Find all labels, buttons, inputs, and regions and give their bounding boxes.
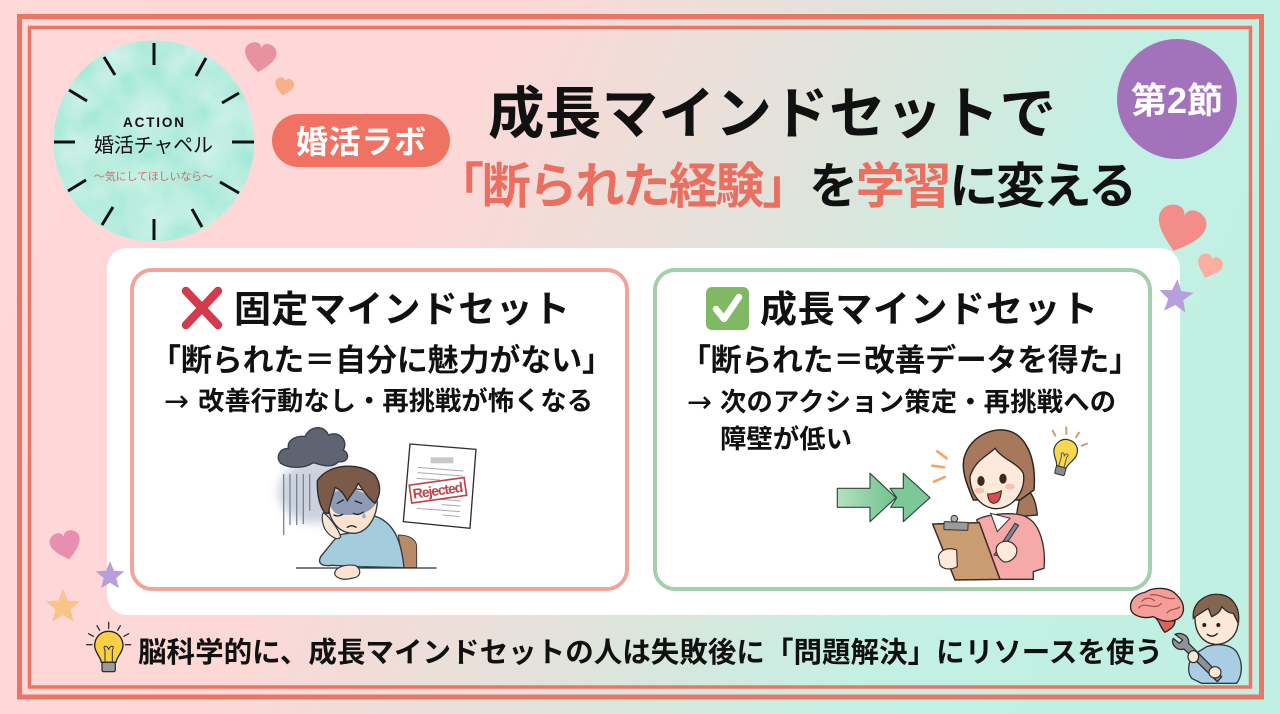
panel: fixed mindset xyxy=(132,270,627,589)
title xyxy=(435,82,1137,214)
decoration: orange heart top xyxy=(273,76,295,97)
fixed mindset arrow: → xyxy=(164,384,189,419)
main white panel xyxy=(107,248,1180,615)
clipboard xyxy=(933,515,1000,580)
growth mindset consequence line 2: 障壁が低い xyxy=(720,424,852,454)
neckline xyxy=(991,513,1010,532)
bottom takeaway text: 脳科学的に、成長マインドセットの人は失敗後に「問題解決」にリソースを使う xyxy=(138,637,1163,669)
wrench xyxy=(1173,634,1222,682)
face xyxy=(328,489,377,533)
icon: lightbulb tip xyxy=(87,622,131,672)
title line 2: 「断られた経験」を学習に変える xyxy=(435,160,1137,214)
decoration: orange star left xyxy=(46,589,80,622)
face xyxy=(970,448,1024,509)
illustration: cheerful woman with clipboard xyxy=(837,427,1087,580)
tear xyxy=(362,513,366,518)
torso and arm xyxy=(320,516,404,568)
decoration: pink heart top xyxy=(242,41,278,74)
ponytail xyxy=(1017,488,1037,517)
growth mindset consequence: 次のアクション策定・再挑戦への xyxy=(720,387,1116,417)
rejected stamp: Rejected xyxy=(412,479,464,502)
storm cloud xyxy=(278,428,348,467)
illustration: brain and boy with wrench xyxy=(1131,588,1241,683)
fixed mindset statement: 「断られた＝自分に魅力がない」 xyxy=(150,343,613,378)
orange accent marks xyxy=(932,451,947,482)
icon: red cross xyxy=(186,291,218,325)
section badge: 第2節: 第2節 xyxy=(1131,80,1223,121)
decoration: red heart right xyxy=(1151,201,1210,258)
logo badge: 婚活チャペル xyxy=(54,40,254,242)
decoration: pink heart left xyxy=(48,528,84,563)
boy head xyxy=(1195,598,1238,644)
hand on clipboard xyxy=(938,549,957,569)
hair xyxy=(317,466,380,513)
title line 1: 成長マインドセットで xyxy=(488,82,1056,145)
brain xyxy=(1131,588,1183,632)
growth mindset arrow: → xyxy=(687,385,712,420)
decoration: purple star right xyxy=(1158,278,1195,313)
hair back xyxy=(963,430,1034,500)
decoration: peach heart right xyxy=(1193,251,1225,282)
logo clock ticks xyxy=(54,43,254,240)
panel: growth mindset xyxy=(655,270,1150,589)
hand on table xyxy=(335,565,360,579)
boy body xyxy=(1189,645,1241,683)
boy hair xyxy=(1193,594,1239,623)
boy face xyxy=(1202,623,1220,636)
fixed mindset heading: 固定マインドセット xyxy=(234,289,570,330)
logo text: tagline: ～気にしてほしいなら～ xyxy=(94,169,213,183)
rain haze xyxy=(278,460,355,523)
rejected letter xyxy=(403,444,476,528)
pen and hand xyxy=(994,523,1019,562)
support hand xyxy=(322,513,341,539)
decoration: purple star left xyxy=(96,561,124,588)
logo text: name: 婚活チャペル xyxy=(94,134,213,157)
heading tag: 婚活ラボ xyxy=(272,114,450,167)
green arrows xyxy=(837,473,930,522)
growth mindset heading: 成長マインドセット xyxy=(760,289,1098,330)
lightbulb xyxy=(1048,427,1087,478)
eyes and cheeks xyxy=(974,474,1015,503)
section badge: 第2節 xyxy=(1117,39,1237,159)
rain lines xyxy=(284,474,310,535)
illustration: dejected man with rejected letter xyxy=(278,428,476,579)
eyes and mouth xyxy=(334,500,363,527)
fixed mindset consequence: 改善行動なし・再挑戦が怖くなる xyxy=(198,386,593,416)
table line xyxy=(296,566,437,570)
chair xyxy=(398,535,417,568)
face shadow xyxy=(329,488,375,515)
icon: green check xyxy=(706,287,749,330)
body xyxy=(977,514,1044,579)
boy hands xyxy=(1188,651,1221,678)
growth mindset statement: 「断られた＝改善データを得た」 xyxy=(680,343,1140,378)
logo text: ACTION: ACTION xyxy=(123,115,184,130)
heading tag: 婚活ラボ: 婚活ラボ xyxy=(296,124,426,160)
